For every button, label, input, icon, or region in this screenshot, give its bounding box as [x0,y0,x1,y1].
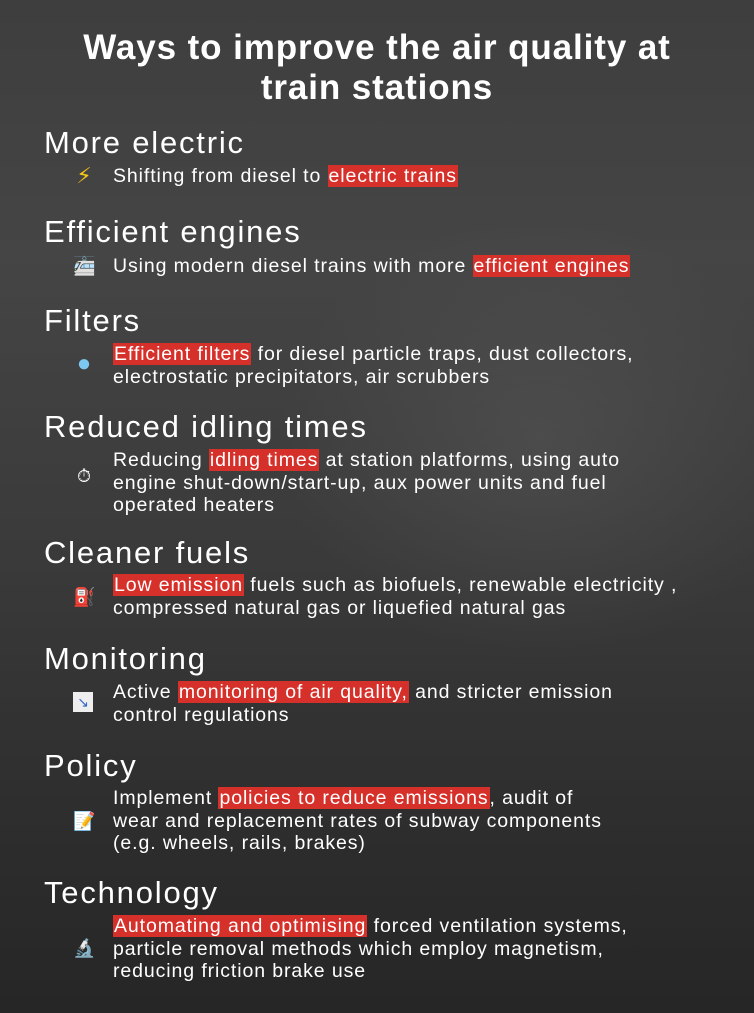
text: monitoring: control regulations [113,704,289,726]
text: technology [113,915,628,982]
icon: lightning: ⚡ [76,163,92,188]
text: filters [113,343,633,388]
text: policy: (e.g. wheels, rails, brakes) [113,832,366,854]
text: policy: wear and replacement rates of subway components [113,810,602,832]
icon: chart [73,692,93,712]
heading: more electric: More electric [44,125,245,160]
text: technology: reducing friction brake use [113,960,366,982]
text: reduced idling: operated heaters [113,494,275,516]
text: more electric: Shifting from diesel to electric trains [113,165,457,187]
text: reduced idling: engine shut-down/start-up, aux power units and fuel [113,472,607,494]
icon: train: 🚈 [73,256,95,276]
text: cleaner fuels: compressed natural gas or liquefied natural gas [113,597,566,619]
heading: efficient engines: Efficient engines [44,214,302,249]
text: monitoring [113,681,613,726]
icon: chart: ↘ [77,694,89,710]
text: technology: particle removal methods which employ magnetism, [113,938,604,960]
heading: policy: Policy [44,748,138,783]
title [83,28,671,107]
title: train stations [261,68,493,107]
heading: monitoring: Monitoring [44,641,207,676]
text: reduced idling [113,449,620,516]
text: cleaner fuels [113,574,677,619]
text: policy: Implement policies to reduce emissions, audit of [113,787,573,809]
text: filters: Efficient filters for diesel particle traps, dust collectors, [114,343,633,365]
text: cleaner fuels: Low emission fuels such as biofuels, renewable electricity , [114,574,677,596]
icon: memo: 📝 [73,811,95,831]
heading: reduced idling: Reduced idling times [44,409,368,444]
heading: cleaner fuels: Cleaner fuels [44,535,250,570]
text: filters: electrostatic precipitators, air scrubbers [113,366,490,388]
text: reduced idling: Reducing idling times at station platforms, using auto [113,449,620,471]
icon: fuel pump: ⛽ [73,587,95,607]
icon: microscope: 🔬 [73,938,95,958]
text: policy [113,787,602,854]
icon: puff: ● [77,350,91,377]
icon: stopwatch: ⏱ [77,466,91,486]
text: monitoring: Active monitoring of air quality, and stricter emission [113,681,613,703]
text: efficient engines: Using modern diesel trains with more efficient engines [113,255,629,277]
heading: filters: Filters [44,303,141,338]
title: Ways to improve the air quality at [83,28,671,67]
text: technology: Automating and optimising forced ventilation systems, [114,915,628,937]
heading: technology: Technology [44,875,219,910]
